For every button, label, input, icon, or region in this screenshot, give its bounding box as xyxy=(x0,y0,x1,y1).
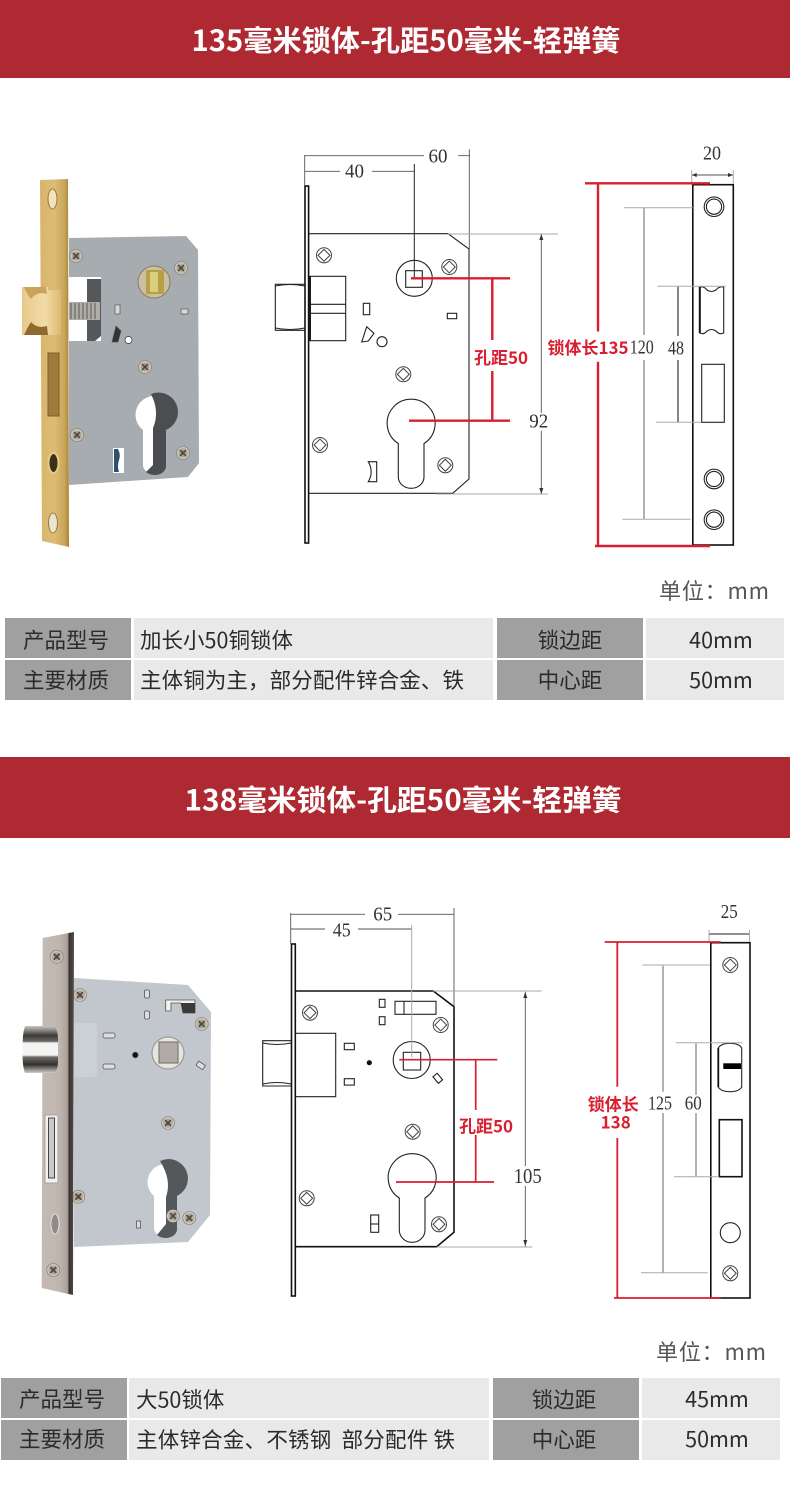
dimension 105 xyxy=(433,991,542,1247)
header: section 1 xyxy=(0,0,790,78)
red callout: hole spacing 50 xyxy=(396,1060,513,1182)
row: model: 锁边距 xyxy=(538,624,602,655)
spindle hub xyxy=(138,266,170,298)
spec table, section 2 xyxy=(1,1378,780,1460)
row: material: 中心距 xyxy=(532,1424,596,1454)
row: model: 40mm xyxy=(689,624,753,655)
row: material: 主要材质 xyxy=(23,664,109,695)
dimension 45 xyxy=(291,920,412,1057)
red callout: body length 138 xyxy=(588,942,721,1298)
cylinder hole xyxy=(388,1154,436,1242)
row: material: 50mm xyxy=(689,664,753,695)
technical drawing: side profile, section 2 xyxy=(263,904,542,1296)
spindle xyxy=(393,1042,430,1078)
faceplate outline xyxy=(711,943,750,1298)
row: material: 主体锌合金、不锈钢 部分配件 铁 xyxy=(136,1424,455,1454)
deadbolt opening xyxy=(719,1120,742,1177)
dimension 92 xyxy=(436,234,558,494)
lock case xyxy=(69,236,199,485)
row: material: 主体铜为主，部分配件锌合金、铁 xyxy=(140,664,464,695)
dimension 60: 60 xyxy=(428,146,448,168)
small openings xyxy=(362,303,457,482)
case outline xyxy=(295,991,454,1247)
header: section 1: 135毫米锁体-孔距50毫米-轻弹簧 xyxy=(192,18,620,60)
dimension 48: 48 xyxy=(668,338,684,360)
small slots xyxy=(103,990,205,1228)
latch opening xyxy=(718,1043,742,1092)
latch xyxy=(263,1033,336,1097)
dimension 20: 20 xyxy=(703,144,721,164)
row: model: 产品型号 xyxy=(19,1383,105,1414)
dimension 60: 60 xyxy=(685,1094,702,1114)
red callout: body length 135 xyxy=(547,183,710,546)
dimension 65 xyxy=(291,904,454,1007)
row: model: 加长小50铜锁体 xyxy=(140,624,293,655)
brass faceplate xyxy=(40,179,69,547)
dimension 105: 105 xyxy=(514,1164,542,1188)
row: material: 主要材质 xyxy=(19,1423,105,1454)
faceplate xyxy=(305,186,309,543)
dimension 92: 92 xyxy=(529,412,548,432)
faceplate outline xyxy=(693,185,733,545)
dimension 25 xyxy=(709,902,750,942)
dimension 20 xyxy=(692,144,733,185)
row: model: 45mm xyxy=(685,1383,749,1414)
technical drawing: side profile, section 1 xyxy=(275,146,558,543)
small openings xyxy=(344,999,443,1232)
lock case xyxy=(74,978,211,1247)
dimension 125 xyxy=(641,965,710,1273)
faceplate holes xyxy=(704,197,724,530)
dimension 120 xyxy=(622,208,693,519)
dimension 60 xyxy=(305,146,470,249)
spindle xyxy=(396,260,432,296)
small slots xyxy=(112,305,188,473)
header: section 2 xyxy=(0,757,790,838)
dimension 40 xyxy=(305,162,414,279)
row: material xyxy=(5,660,784,700)
faceplate holes xyxy=(720,958,740,1281)
row: model: 产品型号 xyxy=(23,624,109,655)
row: material: 50mm xyxy=(685,1423,749,1454)
mounting screws xyxy=(312,248,457,473)
screws xyxy=(70,250,190,460)
red callout: hole spacing 50: 孔距50 xyxy=(474,344,528,369)
faceplate xyxy=(292,944,295,1296)
stainless faceplate xyxy=(42,932,74,1295)
dimension 48 xyxy=(656,286,726,422)
unit label, section 1: 单位：mm xyxy=(659,574,769,606)
header: section 2: 138毫米锁体-孔距50毫米-轻弹簧 xyxy=(184,778,622,820)
dimension 60 xyxy=(674,1043,742,1177)
mounting screws xyxy=(299,1005,448,1232)
deadbolt opening xyxy=(702,364,724,422)
red callout: hole spacing 50 xyxy=(409,278,528,421)
photo: stainless mortise lock body xyxy=(23,932,211,1295)
cylinder cutout xyxy=(148,1159,188,1238)
row: material: 中心距 xyxy=(538,664,602,695)
latch opening xyxy=(700,287,724,334)
row: model xyxy=(1,1378,780,1418)
row: model: 大50锁体 xyxy=(136,1384,224,1414)
cylinder cutout xyxy=(136,392,178,475)
red callout: hole spacing 50: 孔距50 xyxy=(459,1112,513,1138)
spindle hub xyxy=(152,1037,184,1069)
dimension 40: 40 xyxy=(345,162,364,182)
cylinder hole xyxy=(387,399,435,488)
red callout: body length 138: 138 xyxy=(601,1108,631,1134)
row: model: 锁边距 xyxy=(532,1384,596,1414)
brass latch bolt xyxy=(22,287,61,335)
row: model xyxy=(5,618,784,658)
dimension 120: 120 xyxy=(630,338,654,358)
technical drawing: faceplate, section 2 xyxy=(588,902,750,1298)
red callout: body length 138: 锁体长 xyxy=(588,1090,639,1116)
dimension 25: 25 xyxy=(721,902,738,923)
screws xyxy=(72,988,208,1224)
dimension 125: 125 xyxy=(648,1094,672,1114)
photo: brass mortise lock body xyxy=(22,179,199,547)
raised block xyxy=(74,1023,97,1077)
case outline xyxy=(309,234,469,493)
dimension 65: 65 xyxy=(373,904,392,926)
dimension 45: 45 xyxy=(333,920,351,942)
latch window xyxy=(69,277,101,341)
technical drawing: faceplate, section 1 xyxy=(547,144,733,546)
unit label, section 2: 单位：mm xyxy=(656,1335,766,1367)
stainless latch bolt xyxy=(23,1026,58,1073)
row: material xyxy=(1,1420,780,1460)
red callout: body length 135: 锁体长135 xyxy=(547,334,629,359)
spec table, section 1 xyxy=(5,618,784,700)
latch xyxy=(275,276,346,341)
